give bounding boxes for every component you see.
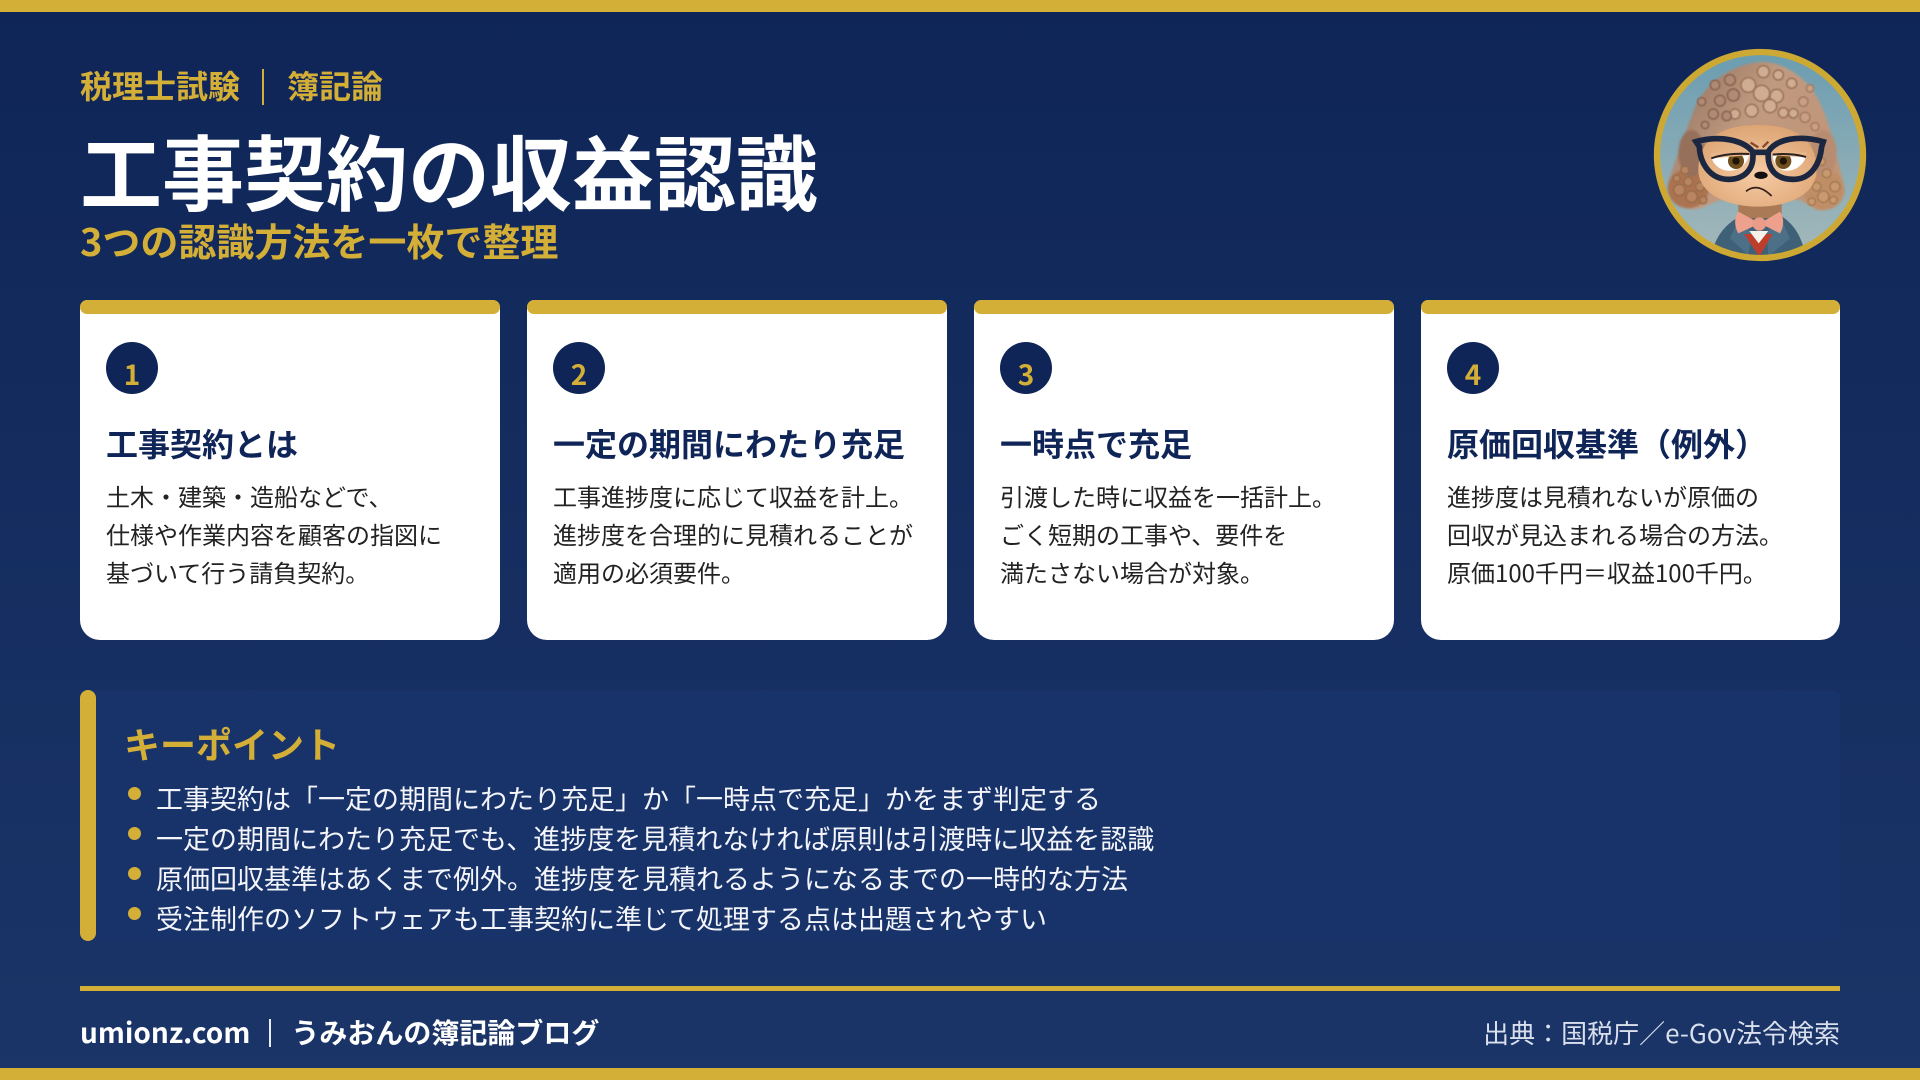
card 1 text [106, 478, 442, 589]
card 1: 工事契約とは [80, 300, 500, 640]
footer brand: umionz.com うみおんの簿記論ブログ [80, 1012, 599, 1052]
card 2: 一定の期間にわたり充足 [527, 300, 947, 640]
card 1 heading: 工事契約とは [106, 420, 298, 466]
card 2 heading: 一定の期間にわたり充足 [553, 420, 905, 466]
card 1 number [106, 342, 158, 394]
bow tie [1735, 212, 1783, 233]
avatar: curly-haired character with glasses [1654, 48, 1866, 262]
neck [1738, 204, 1782, 218]
key point bullets: 原価回収基準はあくまで例外。進捗度を見積れるようになるまでの一時的な方法 [156, 858, 1128, 897]
jacket [1714, 216, 1803, 255]
card 3 number: 3 [1018, 354, 1034, 394]
card 4 number: 4 [1465, 354, 1481, 394]
card 3 text: ごく短期の工事や、要件を [1000, 516, 1287, 551]
card 4 heading: 原価回収基準（例外） [1447, 420, 1767, 466]
card 2 text: 適用の必須要件。 [553, 554, 745, 589]
brow, nose, mouth [1751, 142, 1768, 147]
card 4 text: 進捗度は見積れないが原価の [1447, 478, 1759, 513]
card 2 text: 工事進捗度に応じて収益を計上。 [553, 478, 913, 513]
face [1698, 125, 1817, 207]
card 3 heading: 一時点で充足 [1000, 420, 1192, 466]
back hair [1668, 62, 1845, 210]
eyes [1712, 154, 1749, 171]
card 3 number [1000, 342, 1052, 394]
footer rule [80, 986, 1840, 991]
card 1 text: 仕様や作業内容を顧客の指図に [106, 516, 442, 551]
card 4 text: 回収が見込まれる場合の方法。 [1447, 516, 1783, 551]
card 3 text [1000, 478, 1336, 589]
card 2 number [553, 342, 605, 394]
bottom gold bar [0, 1068, 1920, 1080]
key point bullets: 工事契約は「一定の期間にわたり充足」か「一時点で充足」かをまず判定する [156, 778, 1101, 817]
top gold bar [0, 0, 1920, 12]
card 3 text: 引渡した時に収益を一括計上。 [1000, 478, 1336, 513]
panel: key points [80, 690, 1840, 941]
card 3 text: 満たさない場合が対象。 [1000, 554, 1264, 589]
card 1 number: 1 [124, 354, 140, 394]
key point bullets [128, 778, 1154, 937]
footer source: 出典：国税庁／e-Gov法令検索 [1483, 1014, 1840, 1051]
card 2 text [553, 478, 913, 589]
key point bullets: 一定の期間にわたり充足でも、進捗度を見積れなければ原則は引渡時に収益を認識 [156, 818, 1154, 857]
card 3: 一時点で充足 [974, 300, 1394, 640]
card 4 number [1447, 342, 1499, 394]
main title: 工事契約の収益認識 [80, 109, 818, 228]
card 4: 原価回収基準（例外） [1421, 300, 1840, 640]
card 4 text [1447, 478, 1783, 589]
gold ring [1657, 52, 1863, 258]
subtitle: 3つの認識方法を一枚で整理 [80, 212, 558, 267]
key point bullets: 受注制作のソフトウェアも工事契約に準じて処理する点は出題されやすい [156, 898, 1047, 937]
card 4 text: 原価100千円＝収益100千円。 [1447, 554, 1767, 589]
card 2 text: 進捗度を合理的に見積れることが [553, 516, 913, 551]
card 1 text: 基づいて行う請負契約。 [106, 554, 369, 589]
key points heading: キーポイント [124, 717, 340, 769]
card 1 text: 土木・建築・造船などで、 [106, 478, 393, 513]
key points accent bar [80, 690, 96, 941]
header tag: 税理士試験 簿記論 [80, 62, 383, 108]
glasses [1696, 138, 1823, 179]
card 2 number: 2 [571, 354, 587, 394]
